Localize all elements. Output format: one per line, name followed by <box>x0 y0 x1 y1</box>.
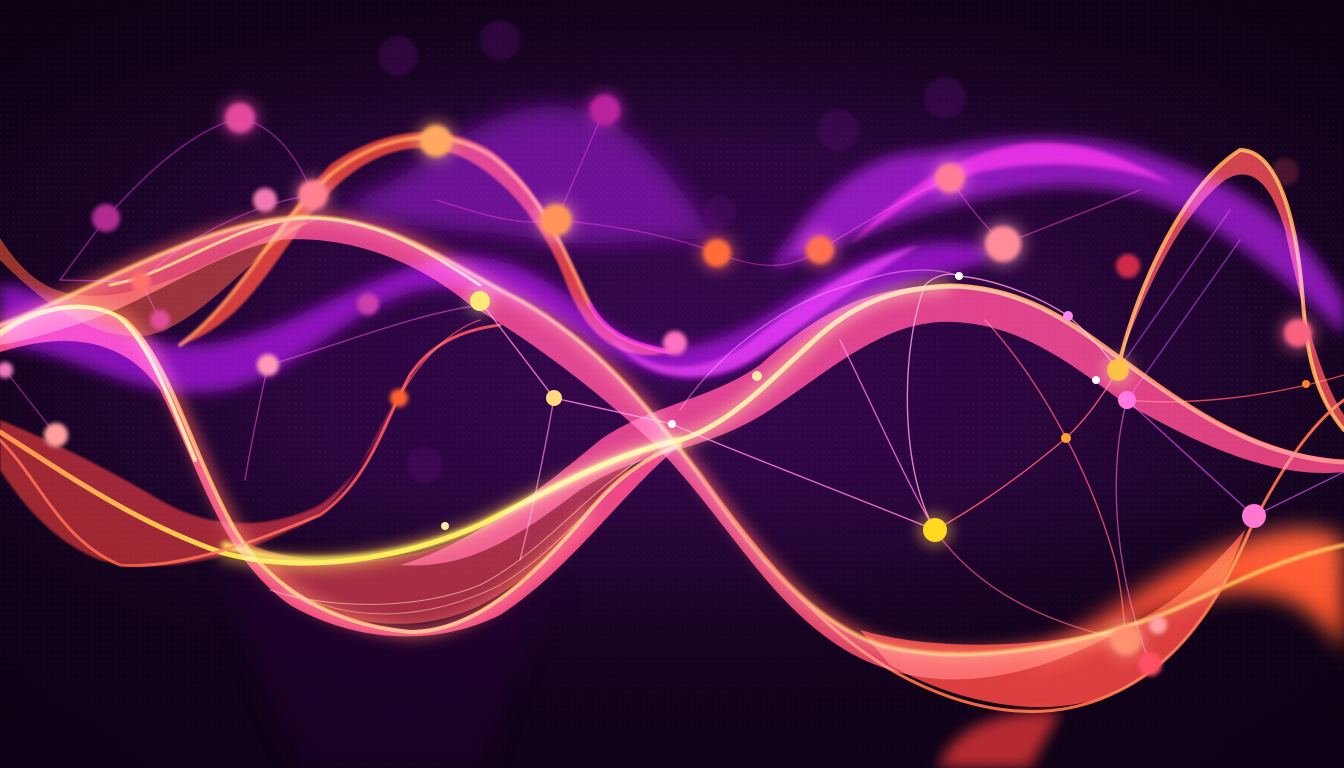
orange glow: lower right <box>1020 529 1344 670</box>
purple ribbon: upper left crest <box>340 106 715 244</box>
orange ribbon: upper arc into magenta <box>180 132 670 355</box>
wave ribbon: lower fold inner fill <box>240 445 650 624</box>
wave ribbon: left fold falling to lower centre <box>0 307 680 636</box>
thin network lines <box>5 110 1344 664</box>
purple ribbon: left to centre <box>0 243 989 393</box>
wide pink ribbon: upper left to lower right <box>0 217 1130 679</box>
faint background bokeh dots <box>378 20 1299 483</box>
bright strokes: main wave edges <box>0 138 1344 711</box>
sharp bright nodes <box>441 272 1310 542</box>
soft glowing nodes <box>0 90 1318 676</box>
orange ribbon: left loop <box>0 218 320 336</box>
wave ribbon: lower left orange fold <box>0 375 410 566</box>
magenta ribbon: centre glow <box>610 245 920 378</box>
purple ribbon: upper right band <box>770 138 1344 335</box>
wave ribbon: right loop <box>1120 150 1344 430</box>
wave ribbon: central twist <box>400 285 1344 565</box>
wave ribbon: lower right belly <box>860 530 1245 707</box>
soft glow around main waves <box>0 217 1130 654</box>
orange glow: bottom edge <box>938 712 1060 768</box>
magenta ribbon: upper right highlight <box>850 143 1175 245</box>
